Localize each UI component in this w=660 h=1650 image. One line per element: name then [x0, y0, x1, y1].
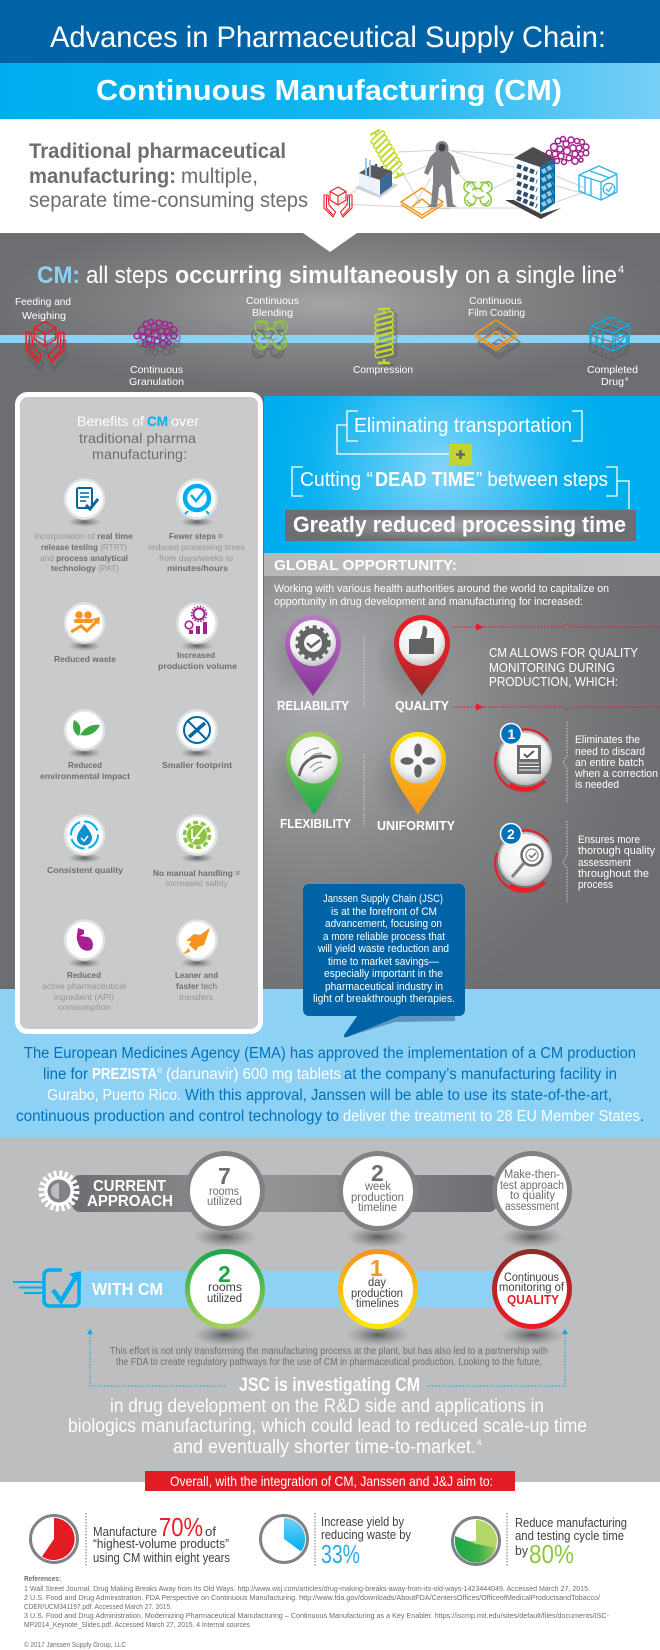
icon: granule cluster: [546, 136, 589, 164]
step: continuous film coating: [468, 295, 525, 358]
stat: 70 percent: “highest-volume products”: [93, 1537, 229, 1551]
item 2: magnifier: 2: [507, 826, 515, 842]
references: References:: [24, 1574, 61, 1583]
text: cutting dead time: [300, 468, 608, 491]
callout: Janssen Supply Chain: is at the forefront of CM: [331, 906, 437, 918]
callout: Janssen Supply Chain: a more reliable process that: [323, 931, 445, 943]
circle: 2 rooms: rooms: [208, 1282, 242, 1294]
item 2 text: process: [578, 879, 614, 891]
CM heading: 4: [618, 264, 624, 276]
CM heading: [37, 262, 624, 289]
benefit: increased production volume: [158, 604, 237, 671]
global intro text: opportunity in drug development and manufacturing for increased:: [274, 596, 583, 608]
benefit: smaller footprint: Smaller footprint: [162, 760, 232, 770]
circle: 7 rooms: utilized: [207, 1196, 242, 1208]
benefit: fewer steps: reduced processing times: [148, 542, 245, 552]
stat: 33 percent: [260, 1513, 412, 1569]
icon: hands: [324, 187, 352, 217]
traditional network illustration: [324, 128, 617, 219]
benefit: consistent quality: [47, 816, 123, 875]
text: eliminating transportation: Eliminating transportation: [354, 414, 572, 437]
JSC investigating text: in drug development on the R&D side and applications in: [110, 1396, 544, 1417]
with CM label: WITH CM: [92, 1279, 163, 1299]
callout: Janssen Supply Chain: light of breakthrough therapies.: [313, 993, 455, 1005]
benefit: reduced environmental impact: Reduced: [68, 760, 102, 770]
benefit: no manual handling: [153, 816, 240, 888]
callout: Janssen Supply Chain: Janssen Supply Chain (JSC): [323, 893, 443, 905]
monitoring heading: PRODUCTION, WHICH:: [489, 674, 618, 689]
JSC investigating text: biologics manufacturing, which could lead to reduced scale-up time: [68, 1416, 587, 1437]
benefit: no manual handling: No manual handling =: [153, 868, 240, 878]
copyright: © 2017 Janssen Supply Group, LLC: [24, 1640, 126, 1649]
pin: flexibility: [267, 732, 351, 831]
circle: 7 rooms: rooms: [209, 1186, 239, 1198]
benefit: real time release testing: and process analytical: [40, 553, 128, 563]
step: continuous granulation: Continuous: [130, 364, 183, 376]
benefit: reduced environmental impact: environmental impact: [40, 771, 130, 781]
benefit: leaner tech transfers: transfers: [179, 992, 213, 1002]
stat: 70 percent: Manufacture: [93, 1525, 157, 1539]
left strip background: [0, 403, 264, 989]
benefits heading: [77, 413, 199, 462]
EMA text: continuous production and control technology to: [16, 1108, 339, 1125]
circle: continuous monitoring: [494, 1252, 570, 1346]
benefit: leaner tech transfers: Leaner and: [175, 970, 218, 980]
references: CDER/UCM341197.pdf. Accessed March 27, 2015.: [24, 1602, 172, 1611]
EMA text: (darunavir) 600 mg tablets: [166, 1066, 341, 1083]
stat: 80 percent: by: [515, 1544, 529, 1558]
EMA text: at the company’s manufacturing facility in: [344, 1066, 617, 1083]
benefit: increased production volume: production volume: [158, 661, 237, 671]
step: completed drug: 4: [625, 377, 628, 383]
panel: reduced processing time: [264, 396, 660, 553]
current approach bar: [72, 1175, 497, 1212]
plus box: [449, 444, 472, 465]
circle: 2 week: timeline: [358, 1202, 397, 1214]
icon: building: [505, 147, 561, 219]
benefit: leaner tech transfers: [175, 920, 218, 1002]
pin: reliability: [266, 615, 349, 713]
item 2 text: thorough quality: [578, 845, 656, 857]
benefit: leaner tech transfers: faster tech: [176, 981, 217, 991]
item 1 text: Eliminates the: [575, 734, 640, 746]
JSC investigating text: and eventually shorter time-to-market.: [173, 1437, 476, 1458]
panel: traditional manufacturing: [0, 119, 660, 233]
step: completed drug: Completed: [587, 364, 638, 376]
circle: 2 week: production: [351, 1192, 404, 1204]
pin: quality: [375, 615, 451, 713]
step: continuous blending: Blending: [252, 307, 293, 319]
callout: Janssen Supply Chain: pharmaceutical industry in: [325, 981, 443, 993]
circle: continuous monitoring: Continuous: [504, 1272, 559, 1284]
references: [24, 1574, 609, 1629]
benefit: real time release testing: technology (PAT): [51, 563, 119, 573]
callout: Janssen Supply Chain: especially important in the: [324, 968, 443, 980]
icon: blend blob: [464, 182, 492, 206]
benefit: fewer steps: Fewer steps =: [169, 531, 223, 541]
dotted bracket 2: [563, 821, 567, 903]
red dashed arrows: [453, 624, 660, 710]
circle: 1 day: 1: [370, 1255, 383, 1281]
JSC investigating text: JSC is investigating CM: [239, 1375, 420, 1396]
EMA text: line for: [43, 1066, 88, 1083]
EMA text: deliver the treatment to 28 EU Member States: [343, 1108, 640, 1125]
panel: global opportunity: [264, 553, 660, 989]
EMA text: PREZISTA: [92, 1066, 157, 1083]
circle: 2 rooms: utilized: [207, 1293, 242, 1305]
subtitle: Continuous Manufacturing (CM): [96, 75, 562, 107]
benefit: real time release testing: [34, 480, 133, 573]
step: continuous film coating: Continuous: [469, 295, 522, 307]
EMA text: With this approval, Janssen will be able to use its state-of-the-art,: [185, 1087, 612, 1104]
stat: 70 percent: using CM within eight years: [93, 1551, 230, 1565]
circle: 2 week: week: [364, 1181, 391, 1193]
benefit: reduced API consumption: [42, 920, 126, 1012]
header: subtitle band: [0, 63, 660, 119]
benefit: smaller footprint: [162, 710, 232, 770]
circle: make then test: to quality: [510, 1190, 555, 1202]
step: continuous blending: Continuous: [246, 295, 299, 307]
callout: Janssen Supply Chain: will yield waste reduction and: [317, 943, 449, 955]
EMA text: [16, 1045, 644, 1125]
panel: benefits of CM: [18, 394, 260, 1032]
CM heading: occurring simultaneously: [175, 262, 458, 289]
traditional text: manufacturing:: [29, 164, 176, 188]
with CM bar: [78, 1271, 497, 1308]
benefit: reduced API consumption: consumption: [58, 1002, 111, 1012]
panel: EMA approval band: [0, 989, 660, 1137]
references: 3 U.S. Food and Drug Administration. Modernizing Pharmaceutical Manufacturing – Continuous Manufacturing as a Key Enabler. https://iscmp.mit.edu/sites/default/files/documents/ISC-: [24, 1611, 609, 1620]
step: continuous film coating: Film Coating: [468, 307, 525, 319]
stat: 33 percent: reducing waste by: [321, 1528, 412, 1542]
step: continuous granulation: Granulation: [129, 376, 184, 388]
benefit: reduced waste: [54, 604, 116, 664]
text: cutting dead time: DEAD TIME: [375, 468, 475, 491]
circle: make then test: Make-then-: [504, 1169, 560, 1181]
circle: 7 rooms: 7: [218, 1163, 231, 1189]
panel: comparison: [0, 1137, 660, 1482]
circle: continuous monitoring: QUALITY: [507, 1292, 559, 1307]
circle: 2 week: [340, 1154, 416, 1248]
benefit: reduced API consumption: Reduced: [67, 970, 101, 980]
item 2 text: Ensures more: [578, 834, 640, 846]
benefits heading: traditional pharma: [79, 430, 196, 446]
callout: Janssen Supply Chain: time to market savings—: [328, 956, 439, 968]
icon: gear: [42, 1174, 76, 1208]
item 2 text: throughout the: [578, 868, 649, 880]
item 2 text: assessment: [578, 857, 631, 869]
brackets and connectors: [292, 411, 629, 509]
circle: 7 rooms: [188, 1154, 262, 1248]
item 2 text: [578, 834, 656, 891]
banner: overall aim: Overall, with the integration of CM, Janssen and J&J aim to:: [170, 1473, 493, 1489]
benefit: fewer steps: from days/weeks to: [159, 553, 233, 563]
callout: Janssen Supply Chain: [303, 884, 465, 1037]
header: main title band: [0, 0, 660, 63]
EMA text: Gurabo, Puerto Rico.: [47, 1087, 181, 1104]
traditional text: multiple,: [181, 164, 258, 188]
stat: 70 percent: of: [205, 1525, 217, 1539]
icon: drug box: [579, 166, 617, 200]
circle: 1 day: [340, 1252, 416, 1346]
item 1 text: [574, 734, 658, 791]
dotted arrows frame: [87, 1329, 568, 1386]
CM heading: all steps: [86, 262, 168, 289]
icon: diamond layers: [401, 188, 443, 218]
item 1 text: is needed: [575, 779, 619, 791]
icon: machine: [355, 158, 398, 198]
stat: 70 percent: [30, 1512, 230, 1567]
effort text: [110, 1346, 548, 1368]
circle: make then test: [494, 1154, 570, 1248]
step: feeding and weighing: Weighing: [22, 310, 66, 322]
benefit: reduced API consumption: ingredient (API): [54, 992, 114, 1002]
stat: 33 percent: 33%: [321, 1539, 360, 1569]
benefit: reduced waste: Reduced waste: [54, 654, 116, 664]
stat: 80 percent: Reduce manufacturing: [515, 1516, 627, 1530]
circle: 1 day: timelines: [356, 1298, 399, 1310]
EMA text: ®: [157, 1067, 163, 1075]
icon: cleanroom person: [424, 141, 460, 207]
EMA text: .: [640, 1108, 644, 1125]
item 1: batch: 1: [508, 726, 516, 742]
step: completed drug: Drug: [601, 376, 624, 388]
benefits heading: over: [171, 413, 199, 429]
references: 2 U.S. Food and Drug Administration. FDA Perspective on Continuous Manufacturing. http://www.fda.gov/downloads/AboutFDA/CentersOffices/OfficeofMedicalProductsandTobacco/: [24, 1593, 601, 1602]
benefit: no manual handling: increased safety: [166, 878, 229, 888]
pin: uniformity: [371, 732, 455, 833]
benefit: real time release testing: Incorporation of real time: [34, 531, 133, 541]
references: MP2014_Keynote_Slides.pdf. Accessed March 27, 2015. 4 Internal sources: [24, 1620, 250, 1629]
stat: 80 percent: [452, 1513, 627, 1569]
step: compression: Compression: [353, 364, 413, 376]
global heading: GLOBAL OPPORTUNITY:: [274, 557, 457, 574]
circle: 1 day: production: [351, 1288, 403, 1300]
callout: Janssen Supply Chain: advancement, focusing on: [325, 918, 442, 930]
current approach label: CURRENT: [93, 1178, 166, 1195]
traditional text: Traditional pharmaceutical: [29, 139, 286, 163]
item 1 text: need to discard: [575, 746, 645, 758]
current approach label: [87, 1178, 173, 1210]
step: feeding and weighing: [15, 296, 71, 370]
circle: 2 rooms: 2: [218, 1261, 231, 1287]
monitoring heading: CM ALLOWS FOR QUALITY: [489, 645, 638, 660]
pin: uniformity: UNIFORMITY: [377, 818, 455, 833]
item 2: magnifier: [495, 824, 552, 896]
effort text: the FDA to create regulatory pathways for the use of CM in pharmaceutical production. Looking to the future,: [116, 1357, 542, 1368]
benefit: real time release testing: release testing (RTRT): [41, 542, 127, 552]
benefit: increased production volume: Increased: [177, 650, 215, 660]
benefits heading: manufacturing:: [92, 446, 187, 462]
panel: CM single line: [0, 233, 660, 403]
notch arrow: [303, 233, 357, 252]
stat: 80 percent: 80%: [529, 1539, 574, 1569]
step: continuous blending: [246, 295, 299, 358]
JSC investigating text: 4: [477, 1438, 482, 1447]
benefit: reduced API consumption: active pharmaceutical: [42, 981, 126, 991]
benefit: consistent quality: Consistent quality: [47, 865, 123, 875]
monitoring heading: MONITORING DURING: [489, 660, 615, 675]
CM heading: CM:: [37, 262, 80, 289]
circle: 2 rooms: [188, 1252, 262, 1346]
global intro text: [274, 583, 609, 608]
text: cutting dead time: ” between steps: [476, 468, 608, 491]
pin: flexibility: FLEXIBILITY: [280, 816, 351, 831]
current approach label: APPROACH: [87, 1193, 173, 1210]
icon: speed check: [13, 1265, 84, 1306]
CM heading: on a single line: [465, 262, 617, 289]
step: completed drug: [587, 317, 638, 388]
stat: 80 percent: and testing cycle time: [515, 1529, 624, 1543]
divider dots: [363, 636, 365, 827]
pin: reliability: RELIABILITY: [277, 698, 349, 713]
benefit: reduced environmental impact: [40, 710, 130, 781]
pin: quality: QUALITY: [395, 698, 449, 713]
benefits heading: Benefits of: [77, 413, 144, 429]
icon: spring: [367, 128, 407, 180]
production line: [0, 335, 660, 343]
circle: continuous monitoring: monitoring of: [499, 1282, 565, 1294]
circle: 1 day: day: [368, 1277, 386, 1289]
step: continuous granulation: [129, 320, 184, 388]
benefit: fewer steps: minutes/hours: [167, 563, 228, 573]
step: feeding and weighing: Feeding and: [15, 296, 71, 308]
JSC investigating text: [68, 1375, 587, 1458]
traditional text: [29, 139, 308, 212]
global intro text: Working with various health authorities around the world to capitalize on: [274, 583, 609, 595]
stat: 33 percent: Increase yield by: [321, 1515, 405, 1529]
traditional text: separate time-consuming steps: [29, 188, 308, 212]
title: Advances in Pharmaceutical Supply Chain:: [50, 21, 606, 54]
effort text: This effort is not only transforming the manufacturing process at the plant, but has also led to a partnership with: [110, 1346, 548, 1357]
dotted bracket 1: [563, 722, 567, 803]
circle: make then test: assessment: [505, 1201, 560, 1213]
text: cutting dead time: Cutting “: [300, 468, 373, 491]
result bar: Greatly reduced processing time: [293, 512, 626, 537]
circle: make then test: test approach: [500, 1180, 564, 1192]
circle: 2 week: 2: [371, 1160, 384, 1186]
stat: 70 percent: 70%: [159, 1512, 203, 1542]
references: 1 Wall Street Journal. Drug Making Breaks Away from Its Old Ways. http://www.wsj.com/articles/drug-making-breaks-away-from-its-old-ways-1423444049. Accessed March 27, 2015.: [24, 1584, 590, 1593]
benefits heading: CM: [147, 413, 168, 429]
item 1 text: when a correction: [574, 768, 658, 780]
EMA text: The European Medicines Agency (EMA) has approved the implementation of a CM production: [24, 1045, 636, 1062]
step: compression: [353, 309, 413, 376]
monitoring heading: [489, 645, 638, 689]
benefit: fewer steps: [148, 480, 245, 573]
item 1: batch: [495, 724, 552, 795]
item 1 text: an entire batch: [575, 757, 644, 769]
